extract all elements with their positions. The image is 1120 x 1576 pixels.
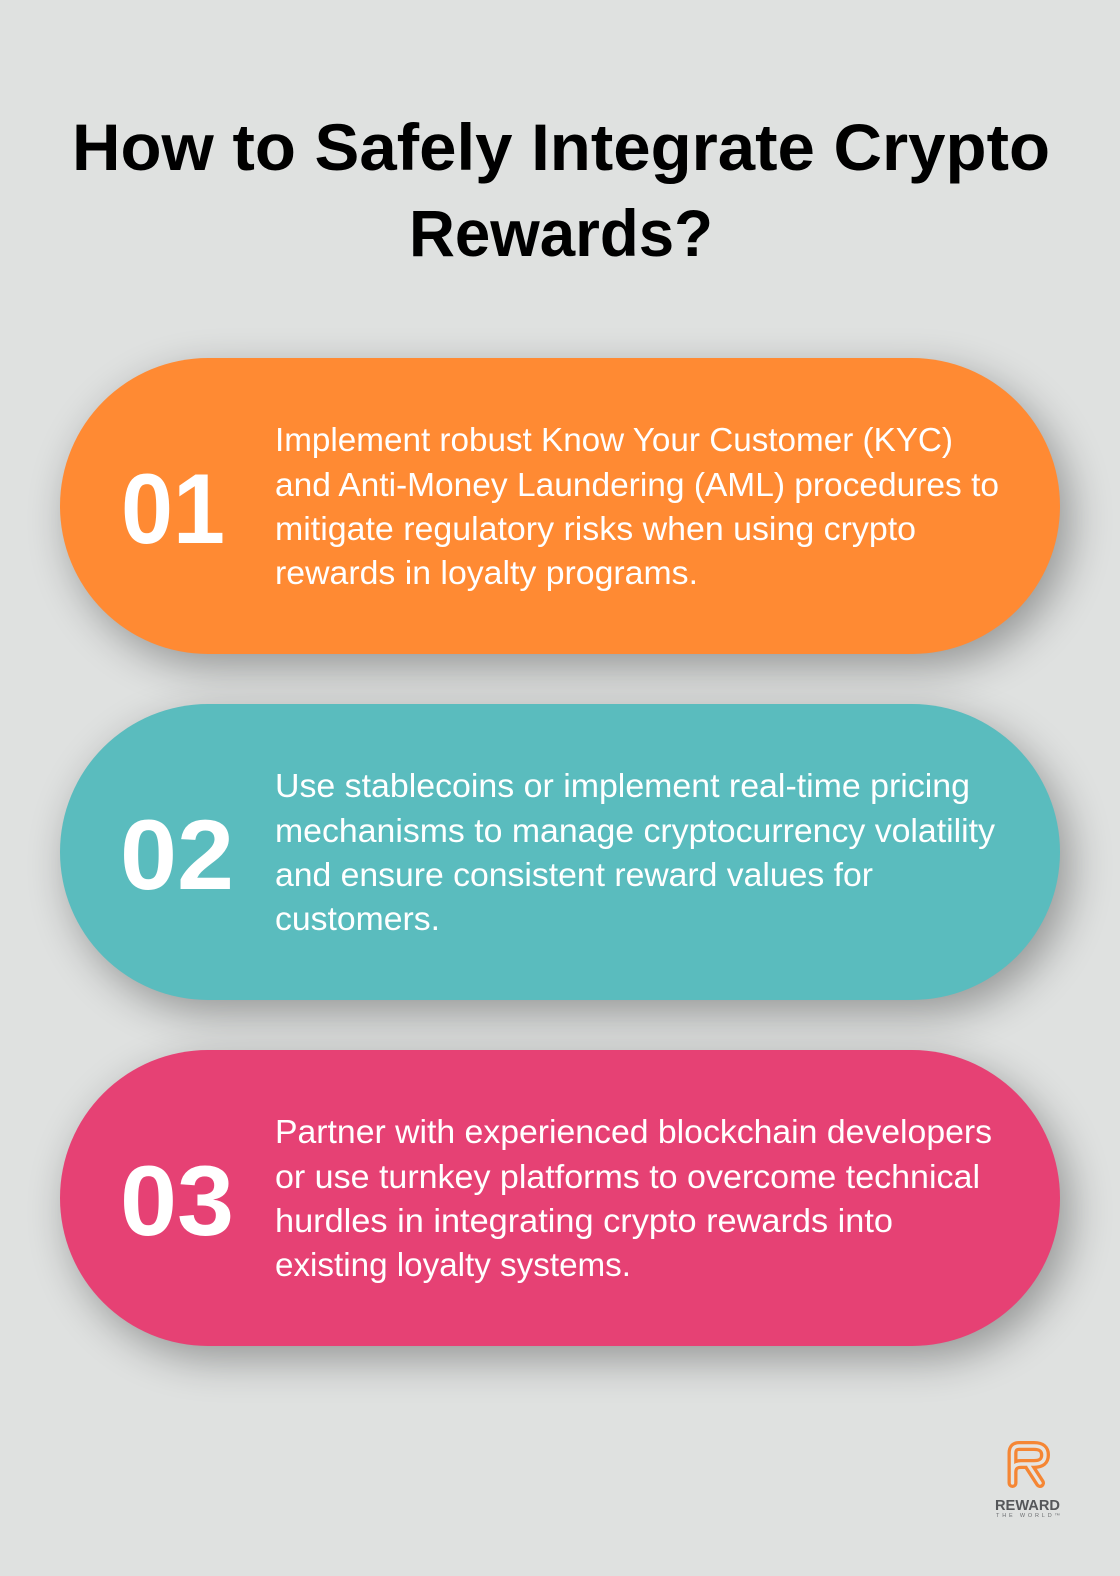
title — [72, 110, 1050, 270]
title: How to Safely Integrate Crypto — [72, 110, 1050, 184]
text: step 01 description: and Anti-Money Laundering (AML) procedures to — [275, 466, 999, 503]
title: Rewards? — [409, 196, 713, 270]
icon: R mark — [1012, 1446, 1045, 1483]
text: step 03 description: hurdles in integrating crypto rewards into — [275, 1202, 893, 1239]
panel: step 01 — [60, 358, 1070, 667]
pill: orange background — [60, 358, 1060, 654]
text: step 03 description: or use turnkey platforms to overcome technical — [275, 1158, 980, 1195]
text: step 02 description: Use stablecoins or implement real-time pricing — [275, 767, 970, 804]
number 02: 02 — [120, 799, 234, 910]
text: step 02 description: mechanisms to manage cryptocurrency volatility — [275, 812, 996, 849]
pill: pink background — [60, 1050, 1060, 1346]
text: step 01 description: mitigate regulatory risks when using crypto — [275, 510, 916, 547]
text: step 03 description — [275, 1113, 992, 1283]
text: step 03 description: Partner with experienced blockchain developers — [275, 1113, 992, 1150]
text: step 03 description: existing loyalty systems. — [275, 1246, 631, 1283]
wordmark: REWARD — [995, 1498, 1060, 1514]
tagline: THE WORLD™ — [996, 1513, 1060, 1519]
text: step 02 description: and ensure consistent reward values for — [275, 856, 873, 893]
text: step 02 description — [275, 767, 996, 937]
text: step 02 description: customers. — [275, 900, 440, 937]
logo: Reward the World — [995, 1446, 1060, 1519]
panel: step 03 — [60, 1050, 1070, 1359]
pill: teal background — [60, 704, 1060, 1000]
number 03: 03 — [120, 1145, 234, 1256]
text: step 01 description: Implement robust Know Your Customer (KYC) — [275, 421, 953, 458]
text: step 01 description — [275, 421, 999, 591]
panel: step 02 — [60, 704, 1070, 1013]
number 01: 01 — [121, 453, 225, 564]
text: step 01 description: rewards in loyalty programs. — [275, 554, 698, 591]
